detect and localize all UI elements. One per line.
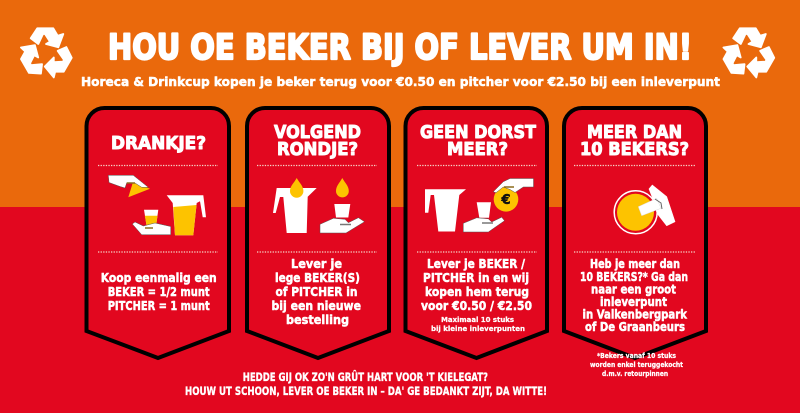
note: maximum per small point [431, 315, 525, 333]
footnote: *Bekers vanaf 10 stuks [597, 351, 676, 360]
icon: hand with token, cup and pitcher [108, 175, 206, 235]
text: volgend rondje: bij een nieuwe [272, 299, 361, 313]
heading: geen dorst meer: MEER? [447, 140, 508, 160]
text: volgend rondje [272, 257, 361, 327]
text: meer dan 10 bekers: 10 BEKERS?* Ga dan [580, 270, 688, 284]
note: maximum per small point: bij kleine inleverpunten [431, 324, 525, 333]
heading: meer dan 10 bekers: 10 BEKERS? [580, 140, 689, 160]
text: meer dan 10 bekers: Heb je meer dan [590, 257, 680, 271]
text: drankje [101, 271, 217, 313]
text: meer dan 10 bekers: of De Graanbeurs [585, 320, 685, 334]
footnote: d.m.v. retourpinnen [602, 369, 668, 378]
text: geen dorst meer: voor €0.50 / €2.50 [421, 299, 532, 313]
icon: pitcher, cup, hand and drops [273, 178, 364, 233]
text: meer dan 10 bekers: inleverpunt [600, 295, 667, 309]
footer slogan [185, 369, 547, 398]
heading: meer dan 10 bekers [580, 123, 689, 160]
panel: volgend rondje [247, 108, 389, 358]
text: volgend rondje: bestelling [286, 313, 349, 327]
icon: pitcher, cup, hands and euro coin: € [500, 193, 511, 208]
footer slogan: HEDDE GIJ OK ZO'N GRÛT HART VOOR 'T KIELEGAT? [243, 369, 488, 384]
text: meer dan 10 bekers [580, 257, 688, 334]
text: meer dan 10 bekers: naar een groot [591, 282, 676, 296]
text: volgend rondje: lege BEKER(S) [275, 271, 360, 285]
text: volgend rondje: of PITCHER in [276, 285, 358, 299]
panel: drankje [86, 108, 229, 358]
footer slogan: HOUW UT SCHOON, LEVER OE BEKER IN – DA' GE BEDANKT ZIJT, DA WITTE! [185, 384, 547, 398]
heading: volgend rondje: RONDJE? [277, 140, 358, 160]
text: geen dorst meer: kopen hem terug [425, 285, 529, 299]
text: drankje: PITCHER = 1 munt [108, 299, 210, 313]
text: geen dorst meer: PITCHER in en wij [423, 271, 529, 285]
text: volgend rondje: Lever je [291, 257, 342, 271]
heading: drankje: DRANKJE? [111, 134, 206, 154]
icon: hand dropping cup in disc [614, 185, 675, 234]
icon: recycling symbol left [16, 28, 75, 80]
heading: geen dorst meer [420, 123, 536, 160]
panel: meer dan 10 bekers [564, 108, 706, 358]
icon: pitcher, cup, hands and euro coin [425, 178, 534, 232]
footnote: worden enkel teruggekocht [590, 360, 683, 369]
text: meer dan 10 bekers: in Valkenbergpark [582, 308, 688, 322]
text: geen dorst meer [421, 257, 532, 313]
heading: volgend rondje [274, 123, 361, 160]
heading: geen dorst meer: GEEN DORST [420, 123, 536, 143]
icon: recycling symbol right [718, 28, 778, 80]
heading: meer dan 10 bekers: MEER DAN [587, 123, 682, 143]
text: drankje: Koop eenmalig een [101, 271, 217, 285]
text: drankje: BEKER = 1/2 munt [108, 285, 210, 299]
panel: geen dorst meer [406, 108, 547, 358]
title: HOU OE BEKER BIJ OF LEVER UM IN! [108, 28, 692, 68]
heading: volgend rondje: VOLGEND [274, 123, 361, 143]
footnote [590, 351, 683, 378]
note: maximum per small point: Maximaal 10 stuks [441, 315, 514, 324]
subtitle: Horeca & Drinkcup kopen je beker terug voor €0.50 en pitcher voor €2.50 bij een inleverpunt [81, 74, 720, 89]
text: geen dorst meer: Lever je BEKER / [427, 257, 526, 271]
